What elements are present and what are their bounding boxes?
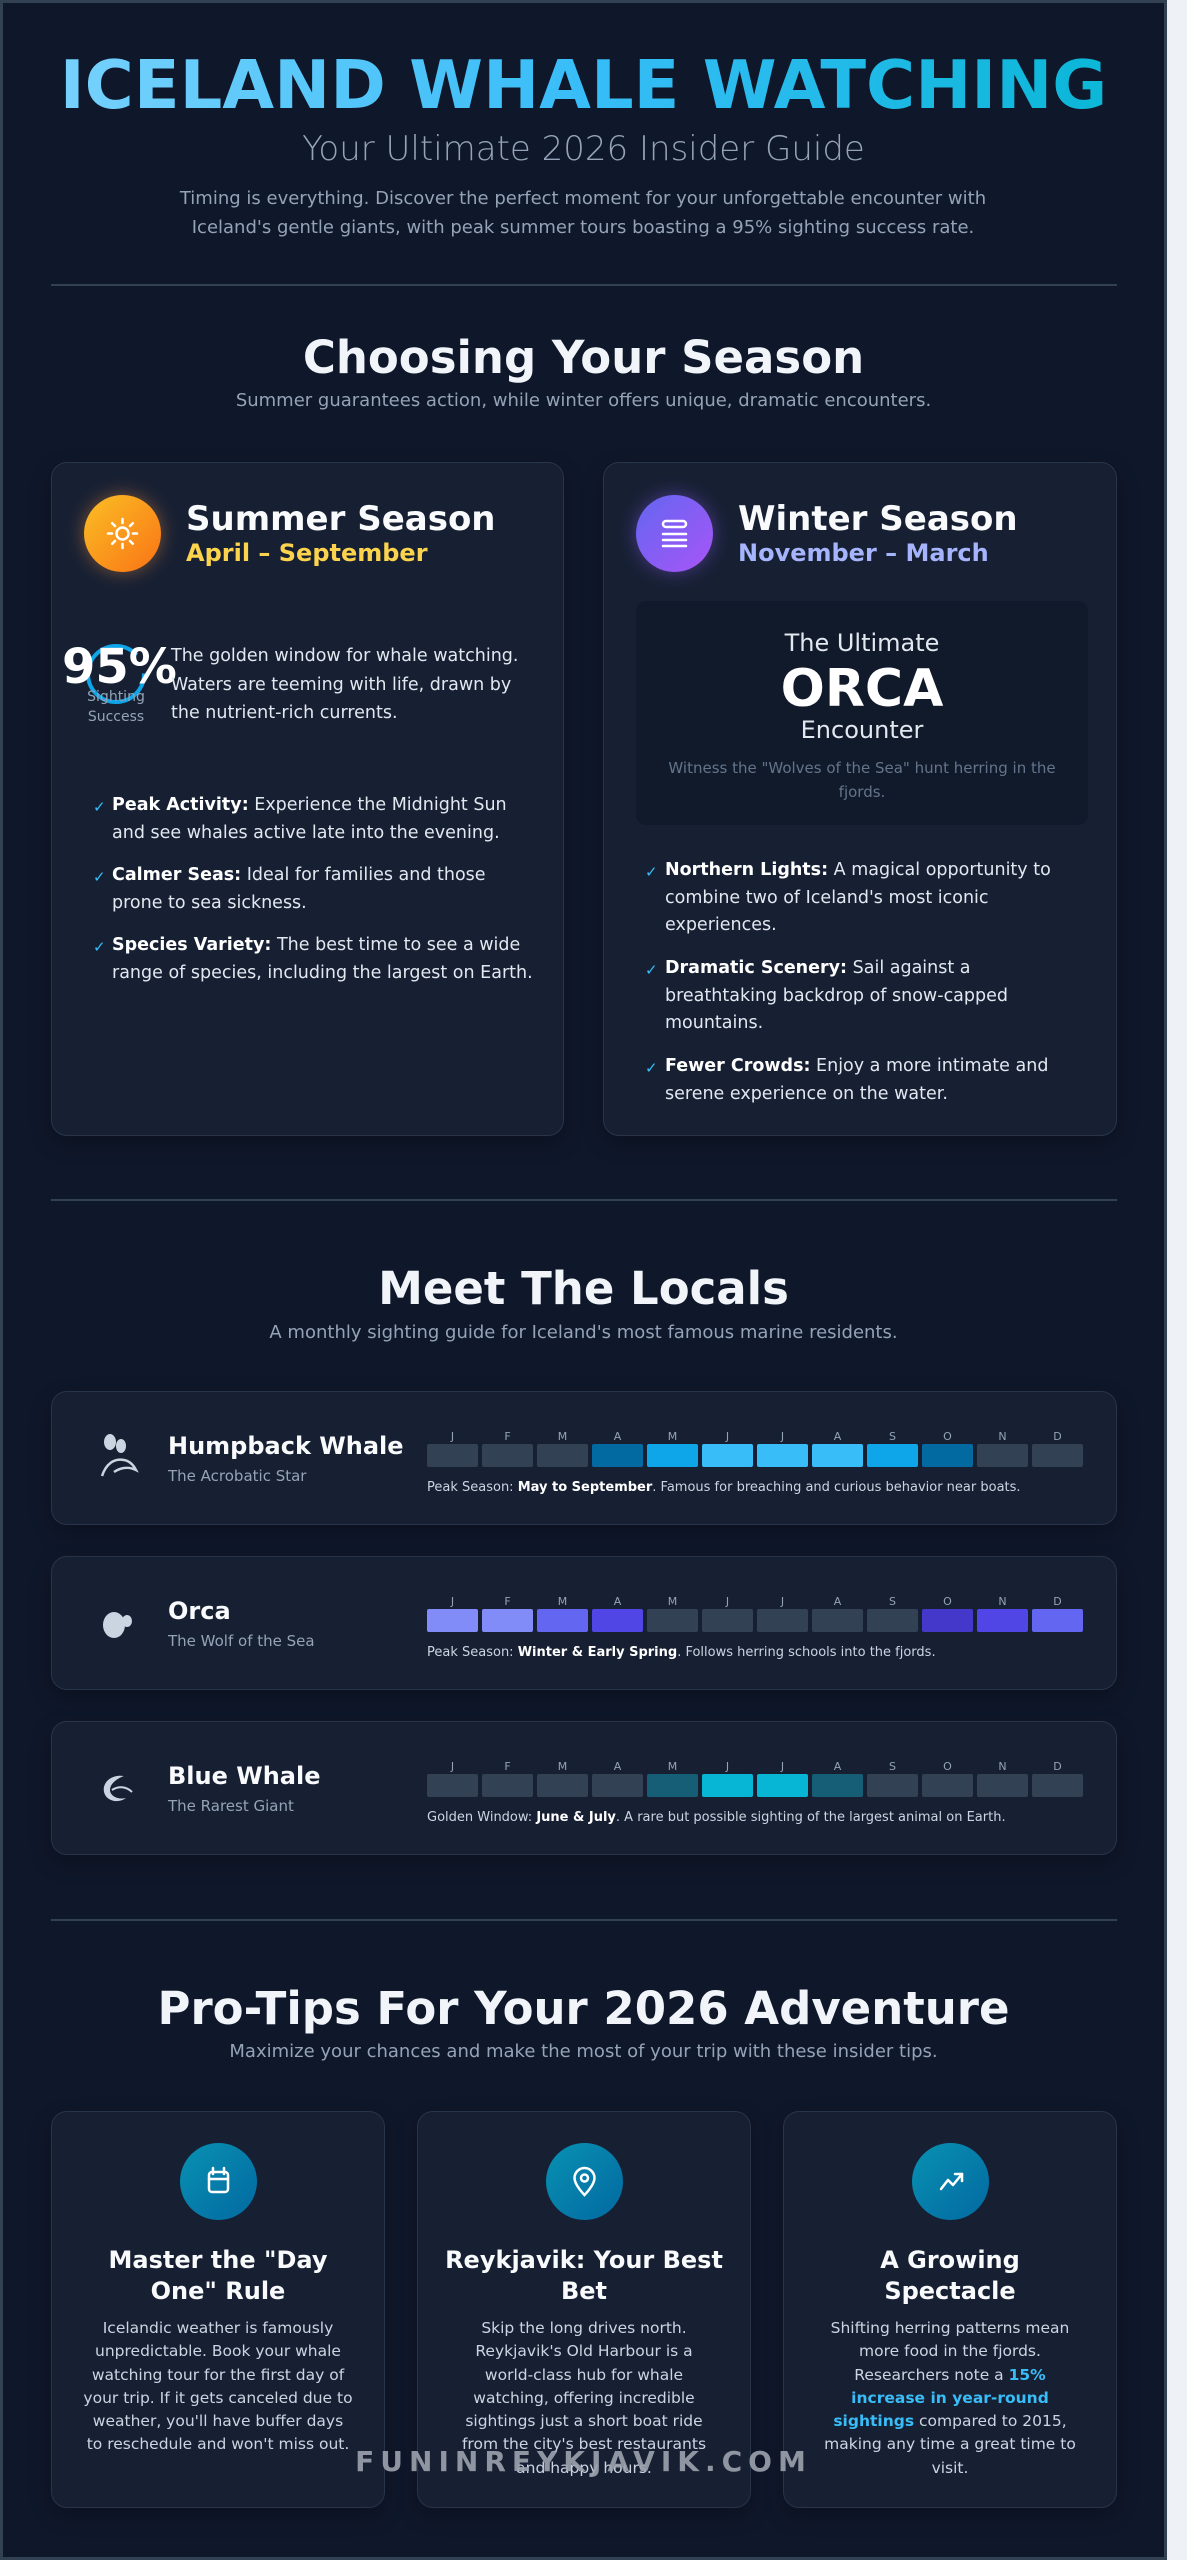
winter bullet list: serene experience on the water.	[665, 1084, 948, 1104]
title: ICELAND WHALE WATCHING	[60, 46, 1107, 124]
panel: tip reykjavik: sightings just a short boat ride	[465, 2412, 703, 2430]
month chart: blue whale: Golden Window: June & July. A rare but possible sighting of the largest animal on Earth.	[427, 1810, 1006, 1825]
subheading: locals: A monthly sighting guide for Iceland's most famous marine residents.	[269, 1322, 898, 1343]
intro text: Timing is everything. Discover the perfect moment for your unforgettable encounter with Iceland's gentle giants, with peak summer tours boasting a 95% sighting success rate.	[180, 188, 986, 238]
panel: winter season	[603, 462, 1117, 1136]
month chart: humpback: M	[558, 1430, 567, 1443]
summer dates: April – September	[186, 539, 428, 567]
heading: meet the locals: Meet The Locals	[378, 1262, 789, 1315]
month chart: humpback: Peak Season: May to September. Famous for breaching and curious behavior near boats.	[427, 1480, 1021, 1495]
panel: tip reykjavik: from the city's best restaurants	[462, 2435, 706, 2453]
month chart: humpback: A	[834, 1430, 841, 1443]
panel: tip reykjavik: Reykjavik: Your Best	[445, 2246, 723, 2274]
subheading: seasons: Summer guarantees action, while winter offers unique, dramatic encounters.	[236, 390, 931, 411]
month chart: blue whale: J	[726, 1760, 729, 1773]
panel: tip day one: your trip. If it gets canceled due to	[83, 2389, 353, 2407]
month chart: blue whale: A	[614, 1760, 621, 1773]
panel: tip growing spectacle: Shifting herring patterns mean	[831, 2319, 1069, 2337]
month chart: orca: M	[668, 1595, 677, 1608]
summer bullet list: Species Variety: The best time to see a wide	[112, 935, 520, 955]
winter dates: November – March	[738, 539, 989, 567]
icon: humpback	[100, 1434, 139, 1476]
panel: tip growing spectacle: visit.	[932, 2459, 968, 2477]
month chart: orca: M	[558, 1595, 567, 1608]
callout: ultimate orca encounter: The Ultimate	[785, 629, 939, 657]
summer bullet list: ✓	[93, 798, 106, 816]
month chart: blue whale: O	[943, 1760, 952, 1773]
winter bullet list: ✓	[645, 863, 658, 881]
subtitle: Your Ultimate 2026 Insider Guide	[302, 129, 865, 169]
panel: tip reykjavik: and happy hours.	[516, 2459, 652, 2477]
summer description: The golden window for whale watching.	[171, 646, 518, 666]
month chart: orca: S	[889, 1595, 896, 1608]
summer description: the nutrient-rich currents.	[171, 703, 398, 723]
summer bullet list: ✓	[93, 938, 106, 956]
callout: ultimate orca encounter: Encounter	[801, 716, 923, 744]
panel: tip growing spectacle: making any time a great time to	[824, 2435, 1076, 2453]
summer bullet list	[93, 795, 533, 982]
panel: tip reykjavik	[417, 2111, 751, 2508]
summer heading: Summer Season	[186, 499, 496, 539]
icon: sun	[84, 495, 161, 572]
month chart: orca: Peak Season: Winter & Early Spring. Follows herring schools into the fjords.	[427, 1645, 936, 1660]
month chart: orca: N	[998, 1595, 1007, 1608]
month chart: humpback: N	[998, 1430, 1007, 1443]
winter bullet list: experiences.	[665, 915, 777, 935]
panel: orca: The Wolf of the Sea	[168, 1632, 315, 1650]
panel: tip day one: One" Rule	[151, 2277, 285, 2305]
heading: pro-tips: Pro-Tips For Your 2026 Adventure	[158, 1982, 1010, 2035]
panel: tip growing spectacle: more food in the fjords.	[859, 2342, 1041, 2360]
winter bullet list: mountains.	[665, 1013, 763, 1033]
panel: tip reykjavik: watching, offering incredible	[473, 2389, 695, 2407]
month chart: orca: J	[726, 1595, 729, 1608]
panel: tip day one: unpredictable. Book your whale	[95, 2342, 341, 2360]
winter heading: Winter Season	[738, 499, 1018, 539]
panel: tip growing spectacle: Spectacle	[884, 2277, 1016, 2305]
month chart: orca: F	[504, 1595, 511, 1608]
panel: orca: Orca	[168, 1597, 231, 1625]
panel: tip day one	[51, 2111, 385, 2508]
panel: blue whale: Blue Whale	[168, 1762, 320, 1790]
month chart: humpback: O	[943, 1430, 952, 1443]
month chart: humpback	[427, 1430, 1083, 1495]
winter bullet list: ✓	[645, 1059, 658, 1077]
panel: orca	[51, 1556, 1117, 1690]
summer bullet list: and see whales active late into the evening.	[112, 822, 500, 842]
summer description	[170, 646, 518, 723]
month chart: humpback: J	[781, 1430, 784, 1443]
panel: tip growing spectacle: sightings compared to 2015,	[833, 2412, 1067, 2430]
month chart: humpback: D	[1053, 1430, 1062, 1443]
winter bullet list: breathtaking backdrop of snow-capped	[665, 986, 1008, 1006]
summer bullet list: prone to sea sickness.	[112, 892, 307, 912]
winter bullet list	[645, 860, 1051, 1104]
month chart: blue whale: S	[889, 1760, 896, 1773]
panel: blue whale: The Rarest Giant	[168, 1797, 294, 1815]
icon: blue whale	[104, 1776, 133, 1802]
summer bullet list: ✓	[93, 868, 106, 886]
month chart: blue whale: M	[668, 1760, 677, 1773]
month chart: orca: A	[614, 1595, 621, 1608]
panel: tip day one: to reschedule and won't miss out.	[87, 2435, 349, 2453]
month chart: blue whale	[427, 1760, 1083, 1825]
winter bullet list: combine two of Iceland's most iconic	[665, 888, 989, 908]
month chart: humpback: A	[614, 1430, 621, 1443]
panel: tip growing spectacle: Researchers note a 15%	[854, 2366, 1046, 2384]
callout: ultimate orca encounter: ORCA	[781, 659, 943, 719]
callout: ultimate orca encounter	[636, 601, 1088, 825]
month chart: orca: A	[834, 1595, 841, 1608]
heading: choosing your season: Choosing Your Season	[303, 331, 864, 384]
winter bullet list: ✓	[645, 961, 658, 979]
panel: tip growing spectacle: increase in year-round	[851, 2389, 1049, 2407]
stat: 95% sighting success: Sighting Success	[87, 689, 145, 725]
month chart: blue whale: F	[504, 1760, 511, 1773]
icon: orca	[103, 1612, 132, 1638]
stat: 95% sighting success	[62, 639, 177, 725]
month chart: humpback: S	[889, 1430, 896, 1443]
month chart: blue whale: J	[781, 1760, 784, 1773]
stat: 95% sighting success: 95%	[62, 639, 177, 695]
month chart: humpback: F	[504, 1430, 511, 1443]
month chart: blue whale: N	[998, 1760, 1007, 1773]
icon: map pin	[546, 2143, 623, 2220]
month chart: humpback: J	[726, 1430, 729, 1443]
winter bullet list: Dramatic Scenery: Sail against a	[665, 958, 971, 978]
watermark: FUNINREYKJAVIK.COM	[355, 2445, 812, 2478]
summer bullet list: range of species, including the largest on Earth.	[112, 962, 533, 982]
panel: humpback whale: Humpback Whale	[168, 1432, 404, 1460]
winter bullet list: Northern Lights: A magical opportunity to	[665, 860, 1051, 880]
month chart: humpback: J	[451, 1430, 454, 1443]
panel: blue whale	[51, 1721, 1117, 1855]
month chart: humpback: M	[668, 1430, 677, 1443]
month chart: orca: J	[781, 1595, 784, 1608]
panel: tip day one: Icelandic weather is famously	[103, 2319, 333, 2337]
summer bullet list: Peak Activity: Experience the Midnight Sun	[112, 795, 507, 815]
month chart: blue whale: D	[1053, 1760, 1062, 1773]
summer description: Waters are teeming with life, drawn by	[171, 675, 511, 695]
summer bullet list: Calmer Seas: Ideal for families and those	[112, 865, 486, 885]
month chart: orca: O	[943, 1595, 952, 1608]
panel: tip reykjavik: world-class hub for whale	[485, 2366, 683, 2384]
callout: ultimate orca encounter: Witness the "Wolves of the Sea" hunt herring in the fjords.	[668, 759, 1056, 801]
panel: tip growing spectacle: A Growing	[880, 2246, 1020, 2274]
panel: tip day one: Master the "Day	[108, 2246, 328, 2274]
panel: tip reykjavik: Reykjavik's Old Harbour is a	[475, 2342, 693, 2360]
panel: tip day one: weather, you'll have buffer days	[93, 2412, 343, 2430]
month chart: blue whale: M	[558, 1760, 567, 1773]
panel: tip reykjavik: Bet	[561, 2277, 607, 2305]
icon: trend arrow	[912, 2143, 989, 2220]
month chart: orca	[427, 1595, 1083, 1660]
panel: tip growing spectacle	[783, 2111, 1117, 2508]
icon: winter	[636, 495, 713, 572]
panel: humpback whale: The Acrobatic Star	[168, 1467, 306, 1485]
month chart: orca: J	[451, 1595, 454, 1608]
month chart: orca: D	[1053, 1595, 1062, 1608]
subheading: pro-tips: Maximize your chances and make the most of your trip with these insider tips.	[229, 2041, 938, 2062]
panel: tip reykjavik: Skip the long drives north.	[481, 2319, 687, 2337]
panel: summer season	[51, 462, 564, 1136]
panel: humpback whale	[51, 1391, 1117, 1525]
month chart: blue whale: A	[834, 1760, 841, 1773]
winter bullet list: Fewer Crowds: Enjoy a more intimate and	[665, 1056, 1048, 1076]
panel: tip day one: watching tour for the first day of	[92, 2366, 344, 2384]
month chart: blue whale: J	[451, 1760, 454, 1773]
icon: calendar	[180, 2143, 257, 2220]
